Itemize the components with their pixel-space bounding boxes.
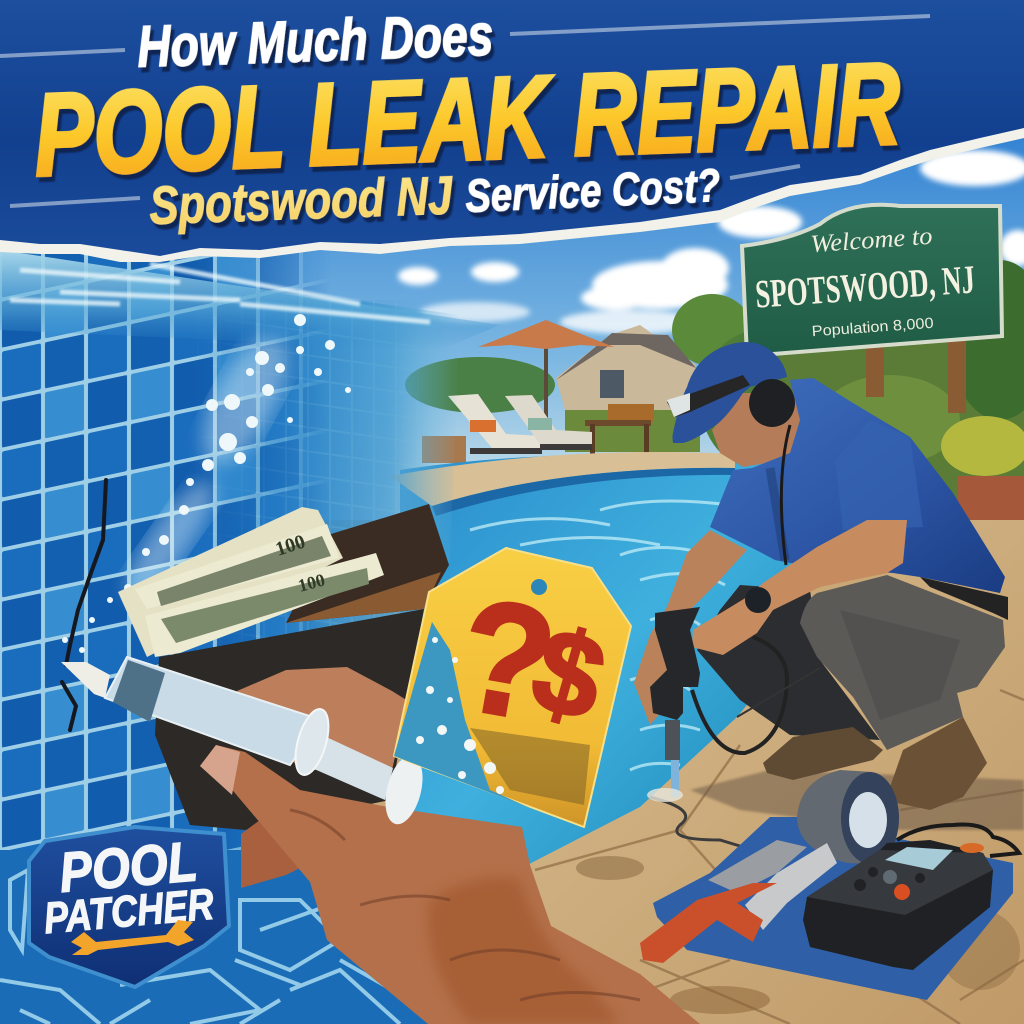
watch	[745, 587, 771, 613]
crack in tile	[62, 480, 106, 730]
wallet	[118, 504, 449, 830]
title	[32, 3, 902, 236]
headset	[749, 379, 795, 427]
Pool Patcher logo	[29, 827, 229, 987]
blue mat	[653, 817, 1013, 1000]
headband lamp	[667, 375, 750, 417]
background trees	[405, 260, 1024, 522]
tile pool wall	[0, 250, 500, 900]
far arm	[634, 530, 747, 725]
title line 3 white: Service Cost?	[464, 159, 721, 222]
torso shirt	[710, 378, 1005, 593]
price tag	[394, 548, 631, 827]
title line 1: How Much Does	[136, 3, 494, 80]
wrench	[640, 840, 837, 963]
neck and face	[712, 393, 807, 467]
leak detection probe	[647, 607, 820, 850]
boots	[763, 727, 883, 780]
price tag: $	[519, 602, 618, 747]
pool coping	[390, 452, 735, 516]
clouds	[398, 150, 1024, 334]
pool floor mosaic	[0, 850, 470, 1024]
patio umbrella	[478, 320, 614, 420]
price tag: ?	[446, 563, 568, 755]
sky background	[0, 120, 1024, 520]
icon: wrench	[71, 920, 194, 955]
lounge chairs	[422, 394, 592, 463]
near thigh	[800, 575, 1005, 750]
pool water	[400, 454, 800, 870]
pool ripples	[470, 501, 730, 770]
rising air bubbles	[62, 314, 351, 653]
syringe	[61, 657, 429, 828]
cap	[672, 342, 787, 443]
top banner with torn edge	[0, 0, 1024, 262]
town sign: Welcome to Spotswood, NJ: Welcome to	[810, 223, 933, 258]
tool kit	[640, 770, 1019, 1000]
stone deck	[480, 520, 1024, 1024]
Pool Patcher logo: PATCHER	[42, 880, 216, 943]
technician	[634, 342, 1008, 810]
banknotes: 100	[273, 531, 308, 561]
title line 3 yellow: Spotswood NJ	[148, 165, 454, 236]
Pool Patcher logo: POOL	[57, 829, 200, 904]
banknotes: 100	[296, 570, 327, 596]
leak meter	[803, 824, 1019, 970]
house and patio	[556, 325, 700, 454]
hand holding syringe	[200, 667, 700, 1024]
tape roll	[797, 770, 899, 864]
headset wire	[781, 425, 790, 565]
wallet back	[286, 504, 449, 623]
town sign: Welcome to Spotswood, NJ	[742, 205, 1002, 413]
palm and forearm	[200, 745, 700, 1024]
belt	[920, 577, 1008, 620]
fingers	[237, 667, 408, 770]
town sign: Welcome to Spotswood, NJ: Population 8,000	[811, 315, 934, 340]
wallet front	[155, 609, 424, 830]
banknotes	[118, 507, 384, 657]
near arm	[692, 520, 907, 655]
far leg	[697, 585, 880, 740]
